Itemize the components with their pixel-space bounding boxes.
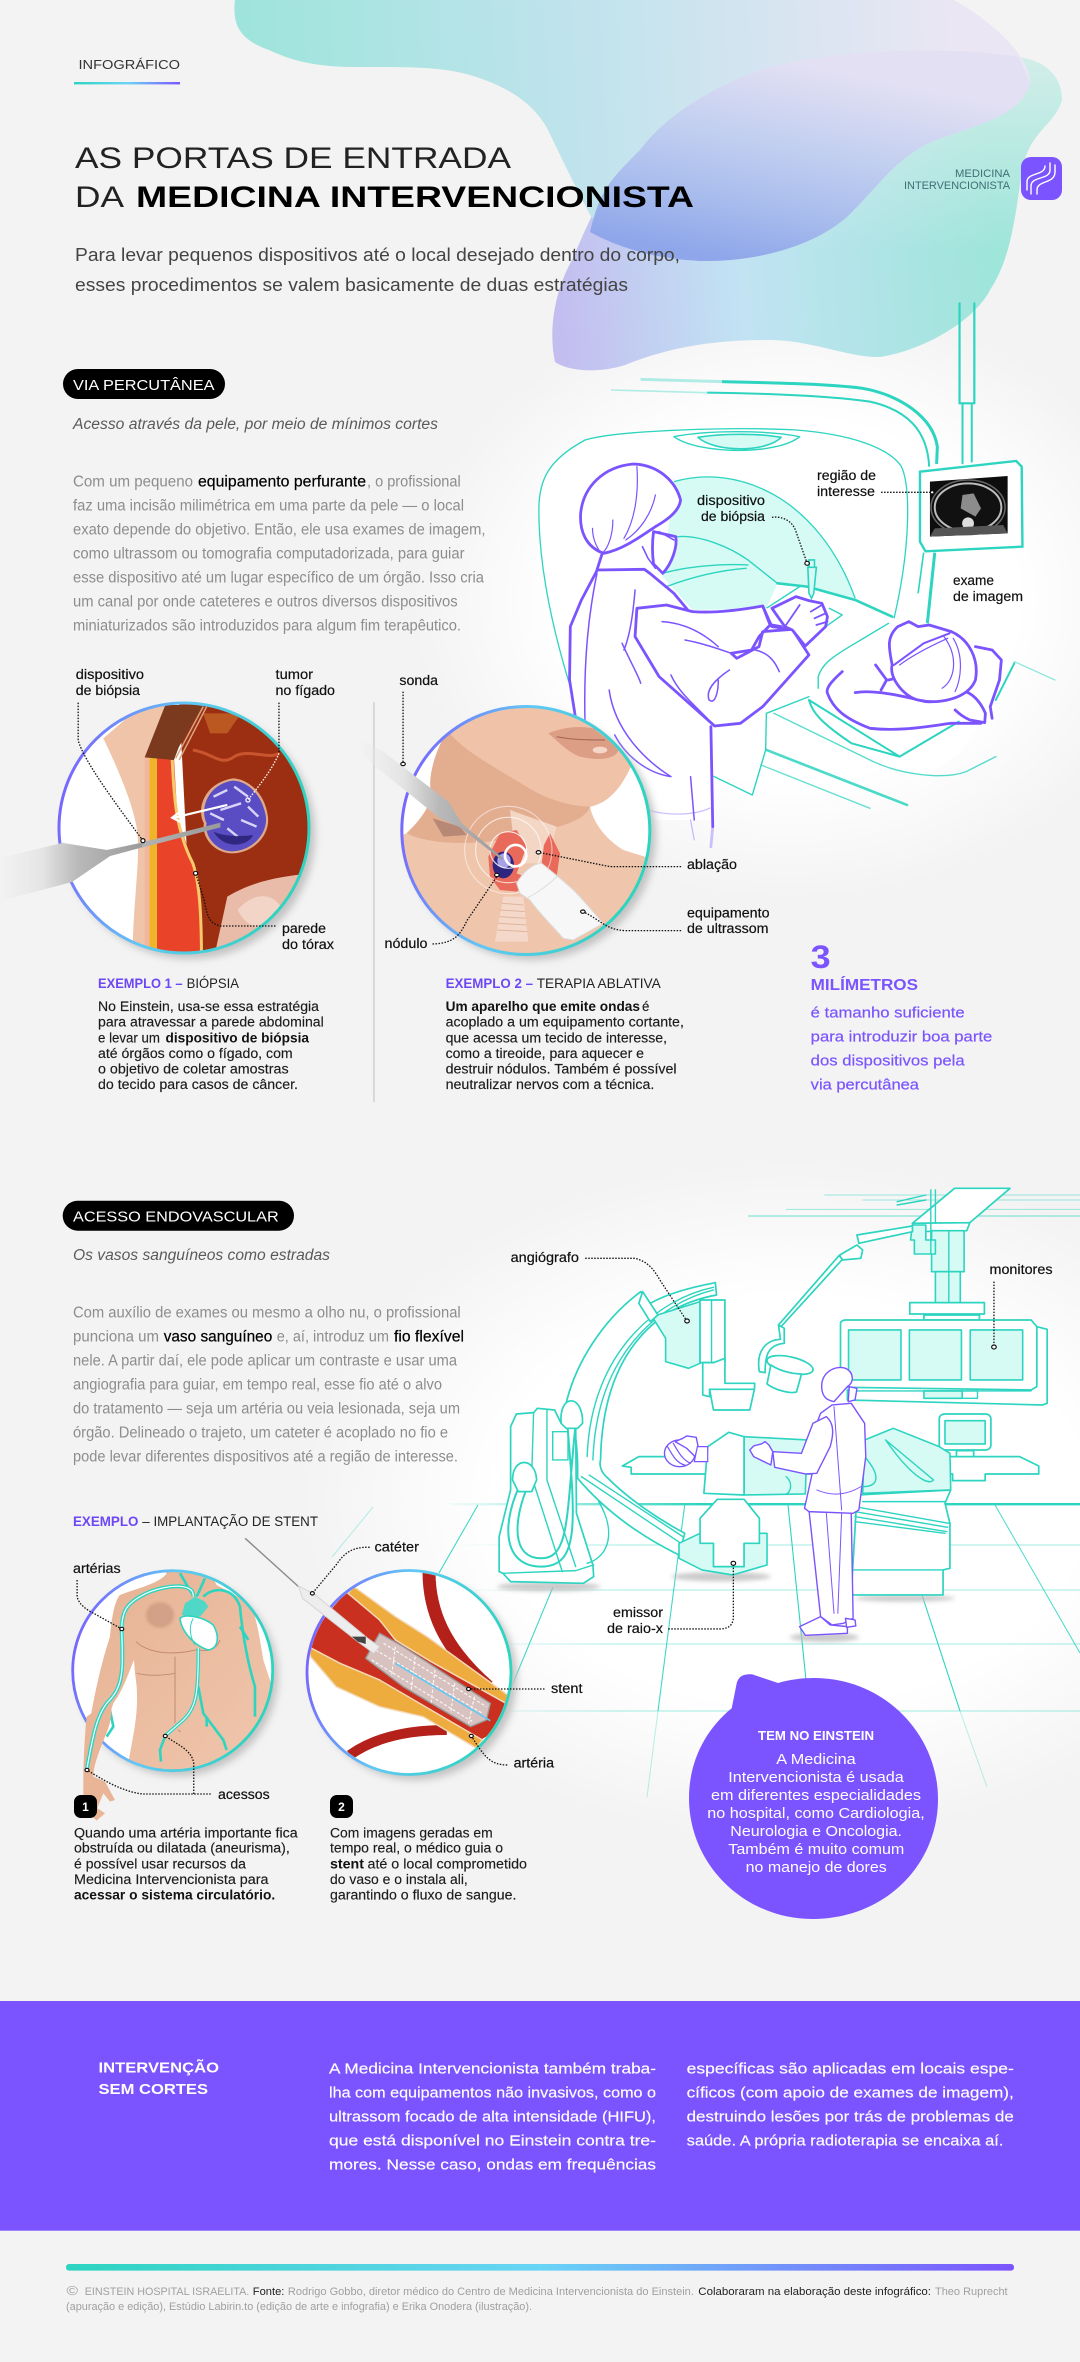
band column 2: destruindo lesões por trás de problemas de — [687, 2109, 1014, 2125]
band column 2: específicas são aplicadas em locais espe- — [687, 2061, 1014, 2077]
bore top oval — [674, 432, 800, 450]
circle: terapia ablativa — [360, 703, 660, 960]
labels: stent panel: catéter — [374, 1540, 420, 1555]
illustration: angiography room — [497, 1188, 1080, 1642]
label: dispositivo de biópsia: de biópsia — [701, 509, 765, 524]
label: emissor de raio-x — [607, 1605, 664, 1636]
text block: via percutânea: equipamento perfurante — [198, 474, 366, 491]
text: exemplo 1: do tecido para casos de câncer. — [98, 1077, 298, 1092]
heading: exemplo 2: TERAPIA ABLATIVA — [537, 975, 661, 991]
heading: exemplo 1: BIÓPSIA — [187, 975, 240, 991]
labels: stent panel — [73, 1540, 583, 1802]
step 2: stent — [330, 1856, 365, 1871]
labels: biópsia: tumor — [276, 667, 314, 682]
white glow behind endovascular scene — [300, 1160, 1080, 1840]
text block: acesso endovascular: fio flexível — [394, 1328, 464, 1345]
label: dispositivo de biópsia — [697, 493, 765, 524]
footer credits: EINSTEIN HOSPITAL ISRAELITA. — [85, 2286, 249, 2298]
heading: exemplo 1 — [98, 975, 240, 991]
text block: via percutânea: Com um pequeno — [73, 474, 193, 491]
text block: via percutânea: exato depende do objetivo. Então, ele usa exames de imagem, — [73, 522, 486, 539]
step 2 — [330, 1795, 527, 1902]
band column 2: saúde. A própria radioterapia se encaixa aí. — [687, 2133, 1003, 2149]
labels: terapia ablativa: nódulo — [384, 936, 428, 951]
callout: tem no einstein: no manejo de dores — [746, 1860, 887, 1876]
text: exemplo 2: acoplado a um equipamento cortante, — [446, 1015, 684, 1030]
eyebrow: infográfico: INFOGRÁFICO — [78, 57, 180, 72]
label: região de interesse — [817, 468, 876, 499]
monitor with CT image — [920, 461, 1022, 551]
callout: tem no einstein: Intervencionista é usada — [728, 1770, 905, 1786]
text block: acesso endovascular: e, aí, introduz um — [277, 1328, 389, 1345]
label: exame de imagem: de imagem — [953, 589, 1023, 604]
text: exemplo 1: e levar um — [98, 1030, 160, 1045]
gantry face — [539, 429, 908, 777]
labels: stent panel: acessos — [218, 1787, 270, 1802]
text block: via percutânea: esse dispositivo até um lugar específico de um órgão. Isso cria — [73, 570, 484, 587]
text: exemplo 1 — [98, 999, 324, 1092]
label: exame de imagem — [953, 573, 1023, 604]
labels: terapia ablativa: equipamento — [687, 906, 770, 921]
callout: 3 milímetros: 3 — [811, 939, 831, 975]
text: exemplo 2: Um aparelho que emite ondas — [446, 999, 640, 1014]
pill: acesso endovascular — [63, 1201, 294, 1231]
C-arm — [566, 1283, 717, 1555]
step 2: do vaso e o instala ali, — [330, 1872, 468, 1887]
small monitor — [939, 1414, 991, 1457]
callout: tem no einstein: Também é muito comum — [728, 1842, 904, 1858]
logo: medicina intervencionista: INTERVENCIONISTA — [904, 180, 1011, 192]
label: angiógrafo: angiógrafo — [511, 1250, 579, 1265]
step 1 — [74, 1795, 298, 1902]
surgical light arm — [759, 1226, 912, 1392]
text block: via percutânea: um canal por onde cateteres e outros diversos dispositivos — [73, 594, 458, 611]
footer credits: Colaboraram na elaboração deste infográfico: — [698, 2286, 931, 2298]
text: exemplo 1: o objetivo de coletar amostras — [98, 1061, 289, 1076]
circle: torso — [73, 1567, 278, 1821]
labels: terapia ablativa: ablação — [687, 857, 737, 872]
labels: terapia ablativa: de ultrassom — [687, 921, 768, 936]
band heading: SEM CORTES — [98, 2082, 208, 2098]
callout: 3 milímetros: é tamanho suficiente — [811, 1005, 965, 1021]
text block: via percutânea — [73, 474, 486, 635]
title: MEDICINA INTERVENCIONISTA — [136, 181, 694, 214]
labels: stent panel: artéria — [514, 1756, 555, 1771]
text block: acesso endovascular: vaso sanguíneo — [164, 1328, 272, 1345]
text block: via percutânea: miniaturizados são introduzidos para algum fim terapêutico. — [73, 618, 461, 635]
heading: exemplo implantação de stent: – IMPLANTAÇÃO DE STENT — [142, 1513, 318, 1529]
label: dispositivo de biópsia: dispositivo — [697, 493, 765, 508]
callout: 3 milímetros: para introduzir boa parte — [811, 1029, 992, 1045]
callout: 3 milímetros: via percutânea — [811, 1077, 920, 1093]
band column 1 — [329, 2061, 656, 2173]
text block: via percutânea: como ultrassom ou tomografia computadorizada, para guiar — [73, 546, 464, 563]
footer credits: Theo Ruprecht — [935, 2286, 1008, 2298]
text block: acesso endovascular: órgão. Delineado o trajeto, um cateter é acoplado no fio e — [73, 1424, 448, 1441]
text: exemplo 2: destruir nódulos. Também é possível — [446, 1061, 677, 1076]
heading: exemplo 1: EXEMPLO 1 – — [98, 975, 183, 991]
doctor — [750, 1367, 866, 1635]
heading: exemplo implantação de stent: EXEMPLO — [73, 1513, 138, 1529]
label: região de interesse: interesse — [817, 484, 875, 499]
subtitle: esses procedimentos se valem basicamente de duas estratégias — [75, 274, 628, 295]
ceiling mount and column — [897, 1188, 1010, 1303]
monitor pole — [960, 303, 974, 463]
gradient rule — [66, 2264, 1014, 2271]
subtitle: via percutânea: Acesso através da pele, por meio de mínimos cortes — [72, 416, 438, 433]
band column 1: ultrassom focado de alta intensidade (HIFU), — [329, 2109, 656, 2125]
text block: acesso endovascular: do tratamento — seja um artéria ou veia lesionada, seja um — [73, 1400, 460, 1417]
footer credits — [66, 2283, 1008, 2313]
eyebrow: infográfico — [74, 57, 180, 84]
leader lines — [772, 491, 934, 565]
title: DA — [75, 181, 124, 214]
labels: biópsia — [76, 667, 335, 952]
footer credits: (apuração e edição), Estúdio Labirin.to (edição de arte e infografia) e Erika Onodera (ilustração). — [66, 2301, 532, 2313]
label: emissor de raio-x: emissor — [613, 1605, 664, 1620]
leaders: stent panel — [77, 1547, 544, 1794]
text: exemplo 2: é — [642, 999, 649, 1014]
step 1: obstruída ou dilatada (aneurisma), — [74, 1841, 290, 1856]
text block: acesso endovascular — [73, 1304, 464, 1465]
label: região de interesse: região de — [817, 468, 876, 483]
band column 1: lha com equipamentos não invasivos, como o — [329, 2085, 656, 2101]
pill: acesso endovascular: ACESSO ENDOVASCULAR — [73, 1209, 279, 1226]
step 1: é possível usar recursos da — [74, 1856, 246, 1871]
bore opening — [663, 477, 855, 610]
doctor — [570, 464, 827, 847]
monitors — [841, 1303, 1047, 1405]
text block: acesso endovascular: nele. A partir daí, ele pode aplicar um contraste e usar uma — [73, 1352, 457, 1369]
text block: via percutânea: faz uma incisão milimétrica em uma parte da pele — o local — [73, 498, 464, 515]
background blobs — [234, 0, 1062, 370]
text: exemplo 1: dispositivo de biópsia — [166, 1030, 309, 1045]
text: exemplo 1: No Einstein, usa-se essa estratégia — [98, 999, 319, 1014]
callout: 3 milímetros — [811, 939, 992, 1093]
step 1: Medicina Intervencionista para — [74, 1872, 269, 1887]
ceiling lines — [748, 1195, 1080, 1216]
circle: stent — [245, 1538, 517, 1780]
title — [75, 142, 694, 214]
text: exemplo 2: neutralizar nervos com a técnica. — [446, 1077, 654, 1092]
step 1: 1 — [82, 1800, 89, 1814]
step 2: tempo real, o médico guia o — [330, 1841, 503, 1856]
callout: tem no einstein: TEM NO EINSTEIN — [758, 1728, 874, 1743]
divider — [373, 702, 375, 1102]
step 2: até o local comprometido — [368, 1856, 527, 1871]
text block: acesso endovascular: punciona um — [73, 1328, 159, 1345]
mobile base — [499, 1401, 609, 1583]
pill: via percutânea — [63, 369, 225, 399]
text block: acesso endovascular: angiografia para guiar, em tempo real, esse fio até o alvo — [73, 1376, 442, 1393]
band: intervenção sem cortes — [0, 2001, 1080, 2231]
labels: biópsia: dispositivo — [76, 667, 144, 682]
step 1: Quando uma artéria importante fica — [74, 1825, 298, 1840]
footer credits: © — [66, 2283, 78, 2298]
callout: tem no einstein: em diferentes especialidades — [711, 1788, 921, 1804]
callout: tem no einstein: A Medicina — [776, 1752, 857, 1768]
labels: biópsia: do tórax — [282, 937, 334, 952]
callout: 3 milímetros: MILÍMETROS — [811, 975, 918, 994]
text: exemplo 2: como a tireoide, para aquecer e — [446, 1046, 644, 1061]
table and sheets — [663, 536, 1055, 808]
X-ray emitter — [679, 1499, 767, 1575]
text block: acesso endovascular: pode levar diferentes dispositivos até a região de interesse. — [73, 1448, 458, 1465]
text: exemplo 2: que acessa um tecido de interesse, — [446, 1030, 667, 1045]
detector — [639, 1292, 755, 1410]
labels: biópsia: de biópsia — [76, 683, 140, 698]
leaders: terapia ablativa — [401, 692, 681, 944]
callout: 3 milímetros: dos dispositivos pela — [811, 1053, 966, 1069]
text: exemplo 1: até órgãos como o fígado, com — [98, 1046, 293, 1061]
heading: exemplo implantação de stent — [73, 1513, 318, 1529]
band column 1: mores. Nesse caso, ondas em frequências — [329, 2157, 656, 2173]
label: exame de imagem: exame — [953, 573, 994, 588]
labels: stent panel: stent — [551, 1681, 583, 1696]
circle: biópsia — [24, 702, 318, 962]
illustration: CT room with doctor and patient — [539, 303, 1055, 847]
heading: exemplo 2: EXEMPLO 2 – — [446, 975, 533, 991]
callout: tem no einstein — [689, 1674, 938, 1919]
leaders — [585, 1258, 996, 1629]
gantry outer lines — [611, 379, 937, 623]
logo: medicina intervencionista — [904, 157, 1062, 200]
table and patient — [622, 1428, 1039, 1595]
title: AS PORTAS DE ENTRADA — [75, 142, 511, 175]
subtitle: acesso endovascular: Os vasos sanguíneos como estradas — [73, 1247, 330, 1264]
text block: via percutânea: , o profissional — [367, 474, 461, 491]
labels: stent panel: artérias — [73, 1561, 121, 1576]
step 2: Com imagens geradas em — [330, 1825, 493, 1840]
callout: tem no einstein: Neurologia e Oncologia. — [730, 1824, 902, 1840]
labels: terapia ablativa: sonda — [399, 673, 439, 688]
text block: acesso endovascular: Com auxílio de exames ou mesmo a olho nu, o profissional — [73, 1304, 461, 1321]
step 1: acessar o sistema circulatório. — [74, 1887, 275, 1902]
patient — [827, 622, 1001, 729]
pill: via percutânea: VIA PERCUTÂNEA — [73, 377, 214, 394]
band column 1: que está disponível no Einstein contra tre- — [329, 2133, 656, 2149]
logo: medicina intervencionista: MEDICINA — [955, 168, 1011, 180]
band column 2: cíficos (com apoio de exames de imagem), — [687, 2085, 1014, 2101]
biopsy device — [808, 560, 816, 598]
leaders: biópsia — [78, 703, 279, 926]
labels: terapia ablativa — [384, 673, 770, 951]
step 2: garantindo o fluxo de sangue. — [330, 1887, 516, 1902]
band column 1: A Medicina Intervencionista também traba- — [329, 2061, 656, 2077]
band column 2 — [687, 2061, 1014, 2149]
subtitle: Para levar pequenos dispositivos até o local desejado dentro do corpo, — [75, 244, 680, 265]
band heading — [98, 2059, 219, 2098]
labels: biópsia: no fígado — [276, 683, 335, 698]
floor — [332, 1503, 1080, 1797]
text: exemplo 1: para atravessar a parede abdominal — [98, 1015, 324, 1030]
labels: biópsia: parede — [282, 921, 326, 936]
heading: exemplo 2 — [446, 975, 661, 991]
step 2: 2 — [338, 1800, 345, 1814]
subtitle — [75, 244, 680, 295]
callout: tem no einstein: no hospital, como Cardiologia, — [707, 1806, 925, 1822]
white glow behind percutaneous scene — [410, 300, 1080, 900]
band heading: INTERVENÇÃO — [98, 2059, 219, 2077]
floor shadows — [497, 1572, 955, 1642]
label: monitores: monitores — [990, 1262, 1053, 1277]
footer credits: Fonte: — [253, 2286, 284, 2298]
footer credits: Rodrigo Gobbo, diretor médico do Centro de Medicina Intervencionista do Einstein. — [288, 2286, 694, 2298]
label: emissor de raio-x: de raio-x — [607, 1621, 663, 1636]
text: exemplo 2 — [446, 999, 684, 1092]
